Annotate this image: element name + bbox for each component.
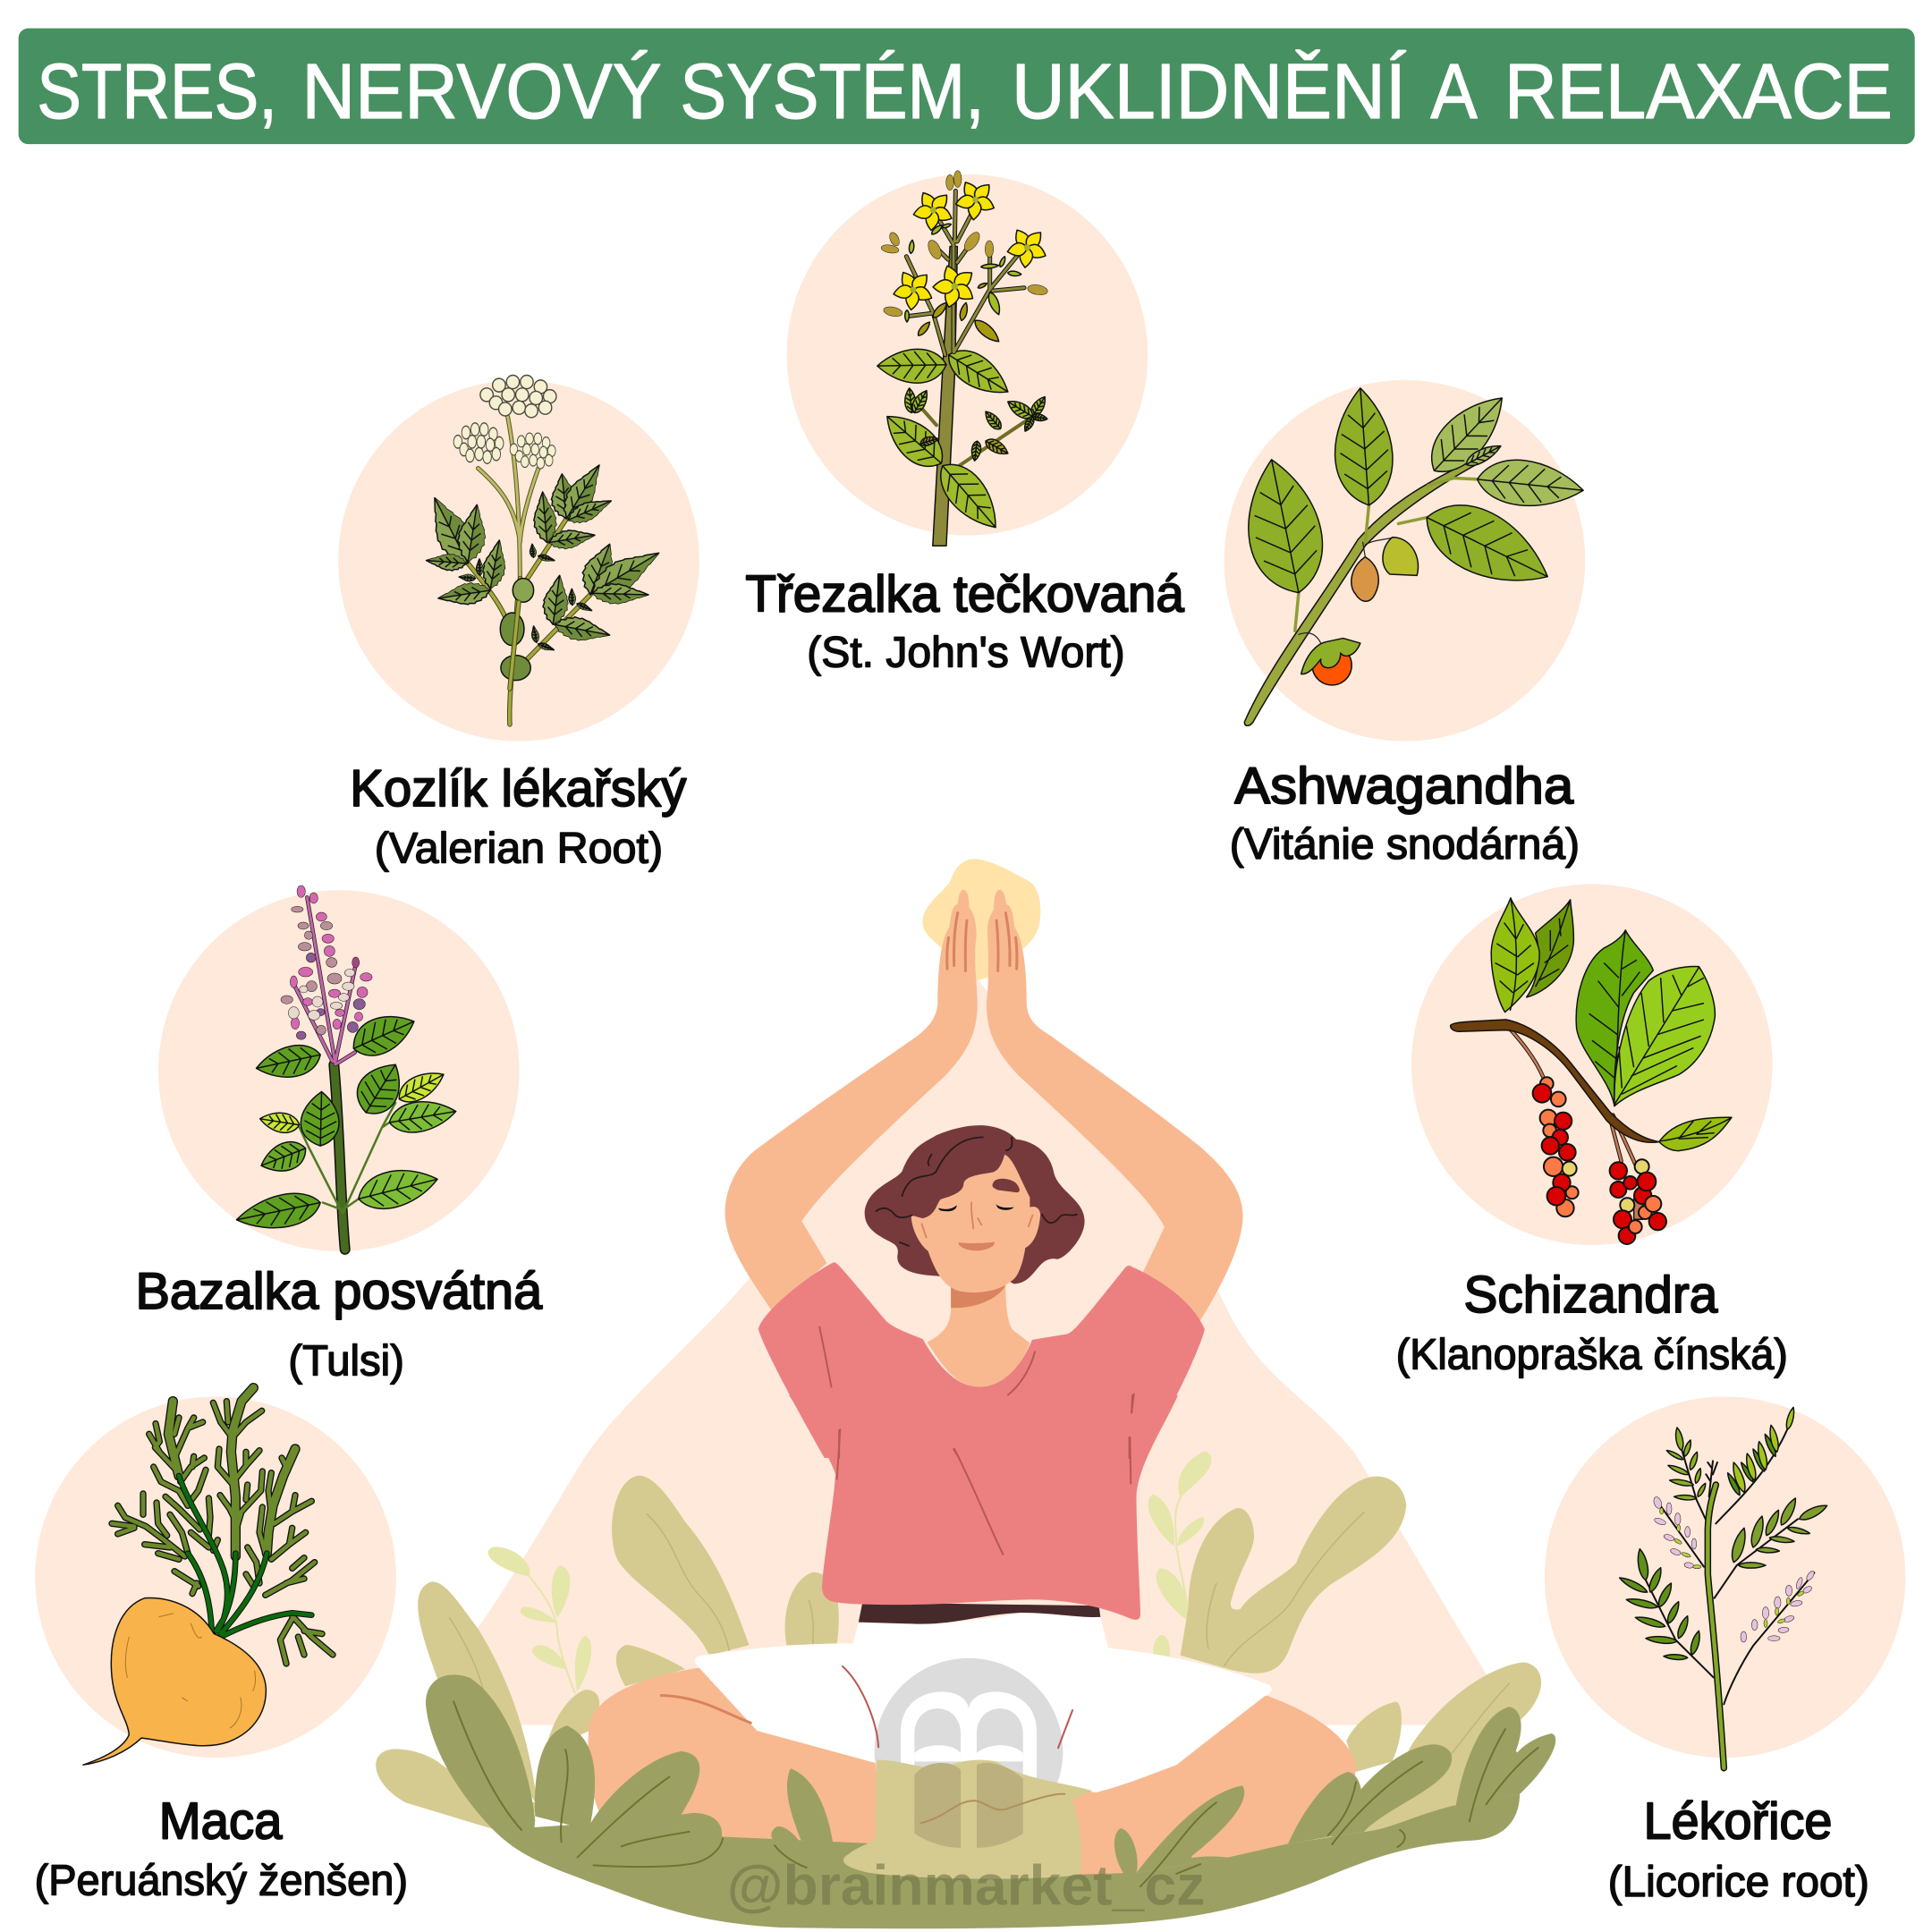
icon: maca root with leaves bbox=[83, 1388, 333, 1765]
title banner: RELAXACE bbox=[1504, 48, 1893, 135]
label: Lékořice: Lékořice bbox=[1644, 1792, 1832, 1850]
peach background shape bbox=[478, 973, 1491, 1725]
cream mound between legs bbox=[843, 1759, 1092, 1879]
head: hair and face bbox=[865, 1125, 1085, 1387]
label: Valerian Root: (Valerian Root) bbox=[375, 824, 663, 872]
label: Bazalka posvátná: Bazalka posvátná bbox=[136, 1263, 543, 1320]
label: Maca: Maca bbox=[159, 1792, 283, 1850]
label: Ashwagandha: Ashwagandha bbox=[1234, 758, 1574, 815]
title banner bbox=[19, 29, 1915, 144]
panel: Bazalka posvátná bbox=[136, 886, 543, 1385]
panel: Ashwagandha bbox=[1224, 380, 1586, 869]
yellow blob bbox=[923, 859, 1040, 980]
panel: Třezalka tečkovaná bbox=[745, 171, 1185, 676]
icon: holy basil plant bbox=[233, 886, 458, 1250]
panel: Maca bbox=[35, 1388, 408, 1905]
watermark text: @brainmarket_cz bbox=[727, 1855, 1205, 1918]
label: Schizandra: Schizandra bbox=[1464, 1267, 1718, 1324]
icon: St. John's wort plant bbox=[875, 171, 1055, 546]
label: Vitánie snodárná: (Vitánie snodárná) bbox=[1230, 820, 1580, 869]
icon: valerian plant bbox=[419, 376, 666, 724]
label: Klanopraška čínská: (Klanopraška čínská) bbox=[1396, 1330, 1788, 1378]
icon: schisandra branch with berries bbox=[1451, 898, 1732, 1244]
label: Kozlík lékařský: Kozlík lékařský bbox=[350, 760, 686, 818]
title banner: STRES, bbox=[37, 48, 277, 135]
panel: Lékořice bbox=[1545, 1396, 1905, 1906]
label: Třezalka tečkovaná: Třezalka tečkovaná bbox=[745, 565, 1185, 623]
label: Tulsi: (Tulsi) bbox=[288, 1336, 404, 1385]
arms and hands bbox=[725, 890, 1243, 1323]
panel: Schizandra bbox=[1396, 884, 1788, 1378]
legs bbox=[588, 1667, 1356, 1881]
foreground ground and leaves bbox=[426, 1674, 1555, 1928]
panel: Kozlík lékařský bbox=[338, 376, 699, 872]
title banner: UKLIDNĚNÍ bbox=[1012, 48, 1406, 135]
label: St. John's Wort: (St. John's Wort) bbox=[807, 628, 1125, 676]
icon: ashwagandha plant bbox=[1234, 383, 1586, 725]
label: Licorice root: (Licorice root) bbox=[1608, 1858, 1869, 1906]
title banner: SYSTÉM, bbox=[680, 48, 985, 135]
shorts and waistband bbox=[695, 1602, 1272, 1792]
icon: licorice plant bbox=[1618, 1407, 1829, 1768]
watermark logo bbox=[661, 1658, 1072, 1847]
title banner: A bbox=[1430, 48, 1478, 135]
shirt bbox=[758, 1262, 1205, 1620]
background foliage bbox=[376, 1451, 1541, 1832]
label: Peruánský ženšen: (Peruánský ženšen) bbox=[35, 1857, 408, 1905]
title banner: NERVOVÝ bbox=[302, 48, 662, 135]
illustration: meditating woman bbox=[376, 859, 1555, 1928]
